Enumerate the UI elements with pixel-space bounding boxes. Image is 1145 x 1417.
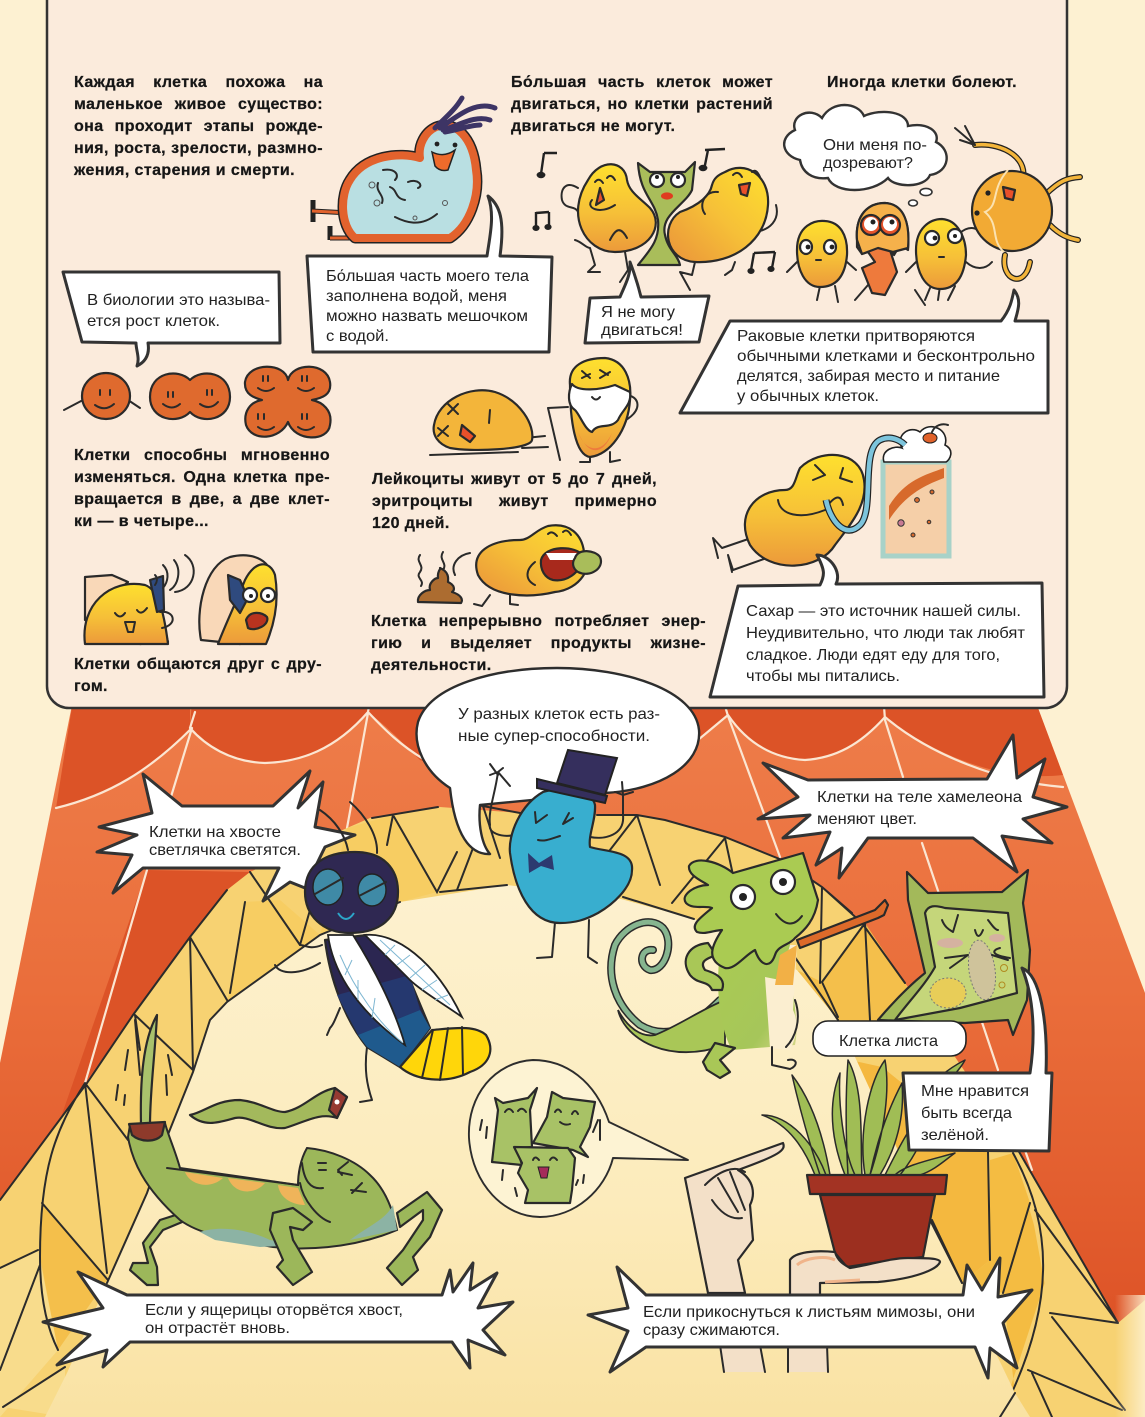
text: every cell is alive: жения, старения и смерти. xyxy=(74,162,295,179)
illustration: sugar drink cell xyxy=(713,424,951,572)
text: cells divide: изменяться. Одна клетка пре- xyxy=(74,469,330,486)
callout: always green: зелёной. xyxy=(921,1127,989,1144)
label: leaf cell xyxy=(813,1021,966,1056)
stage floor xyxy=(45,885,1030,1417)
illustration: old cell with beard xyxy=(548,358,638,462)
text: every cell is alive: маленькое живое существо: xyxy=(74,96,323,113)
callout: water: можно назвать мешочком xyxy=(326,308,528,325)
text: cells can move: Бо́льшая часть клеток может xyxy=(511,74,773,91)
callout: cancer cells: Раковые клетки притворяются xyxy=(737,328,975,345)
text: cell lifespan: эритроциты живут примерно xyxy=(372,493,657,510)
callout: firefly burst: Клетки на хвосте xyxy=(149,824,281,841)
callout: water: заполнена водой, меня xyxy=(326,288,507,305)
pointing hand xyxy=(685,1143,784,1293)
callout: cannot move: двигаться! xyxy=(601,322,683,339)
callout: sugar: Неудивительно, что люди так любят xyxy=(746,625,1026,642)
text: every cell is alive: она проходит этапы рожде- xyxy=(74,118,323,135)
text: energy and waste xyxy=(371,613,706,674)
callout: mimosa burst: Если прикоснуться к листьям мимозы, они xyxy=(643,1304,975,1321)
text: cells communicate: гом. xyxy=(74,678,108,695)
illustration: dancing cells xyxy=(532,149,777,290)
text: cell lifespan: Лейкоциты живут от 5 до 7 дней, xyxy=(372,471,657,488)
text: energy and waste: деятельности. xyxy=(371,657,492,674)
callout: firefly burst xyxy=(97,771,355,901)
cloud callout xyxy=(784,105,947,206)
callout: water: Бо́льшая часть моего тела xyxy=(326,268,529,285)
text: cells can move: двигаться не могут. xyxy=(511,118,675,135)
illustration: cancer cell group xyxy=(787,126,1080,305)
callout: cancer cells: обычными клетками и бесконтрольно xyxy=(737,348,1035,365)
wrists under bottom burst xyxy=(720,1345,828,1372)
cloud callout: дозревают? xyxy=(823,155,913,172)
stage curtain xyxy=(0,700,1145,1340)
lizard tail piece xyxy=(190,1088,347,1128)
callout: superpowers bubble xyxy=(417,668,699,854)
text: cells can move: двигаться, но клетки растений xyxy=(511,96,773,113)
callout: lizard burst: Если у ящерицы оторвётся хвост, xyxy=(145,1302,403,1319)
text: every cell is alive: Каждая клетка похожа на xyxy=(74,74,323,91)
text: cell lifespan xyxy=(372,471,657,532)
callout: water: с водой. xyxy=(326,328,389,345)
text: cells divide xyxy=(74,447,330,530)
callout: cell growth xyxy=(63,272,280,366)
callout: lizard burst: он отрастёт вновь. xyxy=(145,1320,290,1337)
mimosa plant in pot xyxy=(762,1060,965,1267)
blue cell with top hat xyxy=(490,750,633,963)
callout: cell growth: В биологии это называ- xyxy=(87,292,270,309)
text: energy and waste: Клетка непрерывно потребляет энер- xyxy=(371,613,706,630)
label: leaf cell: Клетка листа xyxy=(839,1033,938,1050)
callout: firefly burst: светлячка светятся. xyxy=(149,842,301,859)
callout: mimosa burst: сразу сжимаются. xyxy=(643,1322,780,1339)
callout: sugar xyxy=(710,555,1044,697)
callout: superpowers bubble: ные супер-способности. xyxy=(458,728,650,745)
illustration: dividing cells xyxy=(64,367,331,437)
yellow arch with truss xyxy=(0,803,1145,1417)
top panel xyxy=(47,0,1067,708)
chameleon xyxy=(611,853,888,1078)
illustration: phone cells xyxy=(84,555,277,644)
callout: mimosa burst xyxy=(588,1258,1032,1378)
firefly xyxy=(275,802,490,1102)
callout: superpowers bubble: У разных клеток есть раз- xyxy=(458,706,660,723)
text: every cell is alive: ния, роста, зрелости, размно- xyxy=(74,140,323,157)
callout: sugar: чтобы мы питались. xyxy=(746,668,900,685)
callout: cancer cells: у обычных клеток. xyxy=(737,388,879,405)
callout: water xyxy=(307,196,552,352)
callout: chameleon burst xyxy=(758,735,1067,878)
leaf cell xyxy=(878,870,1030,1035)
callout: sugar: сладкое. Люди едят еду для того, xyxy=(746,647,1000,664)
illustration: eating cell and waste xyxy=(418,525,601,606)
text: every cell is alive xyxy=(74,74,323,179)
illustration: water cell xyxy=(312,98,495,240)
text: cells communicate xyxy=(74,656,322,695)
text: cells communicate: Клетки общаются друг с дру- xyxy=(74,656,322,673)
callout: sugar: Сахар — это источник нашей силы. xyxy=(746,603,1021,620)
cloud callout: Они меня по- xyxy=(823,137,927,154)
lizard with regrowing tail xyxy=(116,1015,442,1285)
text: cells divide: вращается в две, а две клет- xyxy=(74,491,330,508)
text: cells divide: ки — в четыре... xyxy=(74,513,209,530)
callout: chameleon burst: меняют цвет. xyxy=(817,811,917,828)
illustration: dead cell xyxy=(430,390,548,455)
callout: chameleon burst: Клетки на теле хамелеона xyxy=(817,789,1022,806)
callout: lizard burst xyxy=(43,1263,513,1368)
callout: always green: Мне нравится xyxy=(921,1083,1029,1100)
text: cell lifespan: 120 дней. xyxy=(372,515,450,532)
callout: always green xyxy=(903,968,1052,1151)
callout: cannot move xyxy=(585,262,709,343)
open hand under pot xyxy=(790,1251,940,1300)
callout: cell growth: ется рост клеток. xyxy=(87,313,220,330)
thought bubble: mimosa cells xyxy=(469,1060,688,1217)
text: energy and waste: гию и выделяет продукты жизне- xyxy=(371,635,706,652)
callout: always green: быть всегда xyxy=(921,1105,1012,1122)
text: cells can move xyxy=(511,74,773,135)
callout: cancer cells: делятся, забирая место и питание xyxy=(737,368,1000,385)
text: cells divide: Клетки способны мгновенно xyxy=(74,447,330,464)
text: cells get sick: Иногда клетки болеют. xyxy=(827,74,1017,91)
callout: cannot move: Я не могу xyxy=(601,304,675,321)
callout: cancer cells xyxy=(680,290,1048,413)
